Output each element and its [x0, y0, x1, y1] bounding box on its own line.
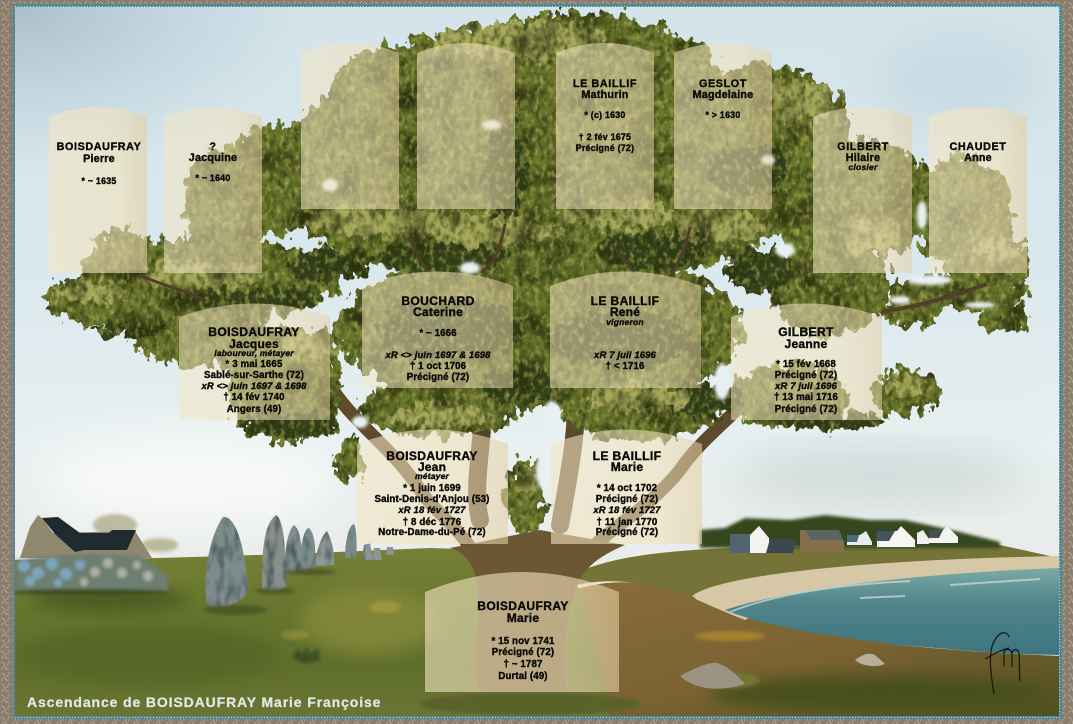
card: LE BAILLIF Mathurin — [556, 43, 654, 209]
card: GILBERT Jeanne — [731, 304, 882, 420]
main branches in crown — [140, 225, 985, 311]
card: ? Jacquine: * ~ 1640 — [195, 173, 231, 183]
card: BOISDAUFRAY Pierre: BOISDAUFRAY — [57, 141, 142, 153]
card: LE BAILLIF René: † < 1716 — [606, 361, 645, 372]
card: BOUCHARD Caterine: † 1 oct 1706 — [410, 361, 467, 372]
card: GILBERT Hilaire: Hilaire — [846, 152, 880, 164]
card: LE BAILLIF Mathurin: Précigné (72) — [576, 143, 634, 153]
foliage: crown and wings base — [45, 12, 1032, 533]
grass at trunk foot — [420, 693, 640, 715]
card: GESLOT Magdelaine: Magdelaine — [693, 89, 753, 101]
card: empty ancestor right — [417, 43, 515, 209]
stone shadows on grass — [203, 569, 336, 615]
card: BOISDAUFRAY Marie: Durtal (49) — [498, 671, 548, 682]
title: Ascendance de BOISDAUFRAY Marie Françoise — [27, 694, 381, 710]
card: BOISDAUFRAY Jean: * 1 juin 1699 — [403, 483, 461, 494]
hydrangea bushes — [10, 554, 170, 595]
card: BOISDAUFRAY Marie: Marie — [507, 611, 539, 625]
card: LE BAILLIF René: xR 7 juil 1696 — [593, 350, 657, 361]
card: ? Jacquine — [164, 107, 262, 273]
card: BOISDAUFRAY Pierre: Pierre — [83, 153, 115, 165]
card: BOISDAUFRAY Marie: BOISDAUFRAY — [477, 599, 569, 613]
card: GESLOT Magdelaine — [674, 43, 772, 209]
card: GILBERT Hilaire: closier — [848, 162, 878, 172]
card: BOISDAUFRAY Jean: Notre-Dame-du-Pé (72) — [378, 527, 486, 538]
card: LE BAILLIF Marie: Précigné (72) — [596, 494, 658, 505]
card: BOISDAUFRAY Jean: † 8 déc 1776 — [403, 517, 462, 528]
card: CHAUDET Anne: CHAUDET — [950, 141, 1006, 153]
left meadow — [15, 548, 610, 716]
ground stones on the slope — [680, 654, 885, 689]
card: LE BAILLIF Mathurin: † 2 fév 1675 — [579, 132, 631, 142]
card: LE BAILLIF Marie: xR 18 fév 1727 — [592, 505, 661, 516]
card: GESLOT Magdelaine: GESLOT — [699, 78, 747, 90]
card: BOISDAUFRAY Marie: Précigné (72) — [492, 647, 554, 658]
painter signature — [985, 633, 1020, 694]
card: GILBERT Jeanne: Précigné (72) — [775, 404, 837, 415]
card: LE BAILLIF Mathurin: * (c) 1630 — [584, 110, 626, 120]
foliage: deep shadow masses — [90, 120, 885, 437]
card: BOUCHARD Caterine: * ~ 1666 — [419, 328, 457, 339]
card: BOISDAUFRAY Jean: BOISDAUFRAY — [386, 449, 478, 463]
card: BOISDAUFRAY Jacques: Angers (49) — [227, 404, 281, 415]
card: GILBERT Jeanne: * 15 fév 1668 — [776, 359, 836, 370]
card: BOUCHARD Caterine — [362, 272, 513, 388]
foliage: sunlit masses — [54, 22, 1025, 496]
card: LE BAILLIF Mathurin: LE BAILLIF — [573, 78, 637, 90]
card: LE BAILLIF Marie: † 11 jan 1770 — [597, 517, 657, 528]
card: LE BAILLIF Marie: LE BAILLIF — [593, 449, 661, 463]
card: LE BAILLIF René: vigneron — [606, 317, 644, 327]
sea — [725, 568, 1059, 655]
card: BOUCHARD Caterine: Caterine — [413, 305, 463, 319]
card: GESLOT Magdelaine: * > 1630 — [705, 110, 741, 120]
card: LE BAILLIF Marie: * 14 oct 1702 — [597, 483, 657, 494]
card: BOISDAUFRAY Pierre: * ~ 1635 — [81, 176, 117, 186]
card: BOISDAUFRAY Jacques: Sablé-sur-Sarthe (72) — [204, 370, 304, 381]
trees behind cottage — [93, 514, 178, 552]
card: BOUCHARD Caterine: Précigné (72) — [407, 372, 469, 383]
card: BOUCHARD Caterine: xR <> juin 1697 & 1698 — [384, 350, 491, 361]
trunk base — [450, 530, 625, 692]
card: BOISDAUFRAY Jean: xR 18 fév 1727 — [397, 505, 466, 516]
tree branches and trunk — [330, 370, 760, 575]
card: BOISDAUFRAY Jacques — [179, 304, 330, 420]
card: BOISDAUFRAY Pierre — [49, 107, 147, 273]
card: CHAUDET Anne — [929, 107, 1027, 273]
card: ? Jacquine: ? — [209, 141, 217, 153]
card: GILBERT Jeanne: † 13 mai 1716 — [774, 392, 839, 403]
card: BOISDAUFRAY Jean: métayer — [415, 471, 450, 481]
card: LE BAILLIF Marie: Précigné (72) — [596, 527, 658, 538]
card: GILBERT Jeanne: GILBERT — [778, 325, 834, 339]
sky gaps through the foliage — [322, 120, 996, 490]
card: BOISDAUFRAY Marie: † ~ 1787 — [504, 659, 542, 670]
card: LE BAILLIF René: René — [610, 305, 640, 319]
stone cottage — [20, 515, 152, 558]
card: LE BAILLIF Marie — [551, 430, 702, 544]
village with white houses — [700, 515, 1000, 553]
beach — [692, 556, 1059, 620]
card: GILBERT Jeanne: xR 7 juil 1696 — [774, 381, 838, 392]
card: LE BAILLIF René — [550, 272, 701, 388]
standing stones — [205, 515, 394, 607]
card: LE BAILLIF Mathurin: Mathurin — [581, 89, 629, 101]
card: BOISDAUFRAY Jacques: BOISDAUFRAY — [208, 325, 300, 339]
card: LE BAILLIF Marie: Marie — [611, 460, 643, 474]
card: BOISDAUFRAY Marie: * 15 nov 1741 — [492, 636, 555, 647]
card: BOISDAUFRAY Jacques: * 3 mai 1665 — [226, 359, 283, 370]
card: ? Jacquine: Jacquine — [189, 152, 237, 164]
card: BOUCHARD Caterine: BOUCHARD — [401, 294, 475, 308]
card: LE BAILLIF René: LE BAILLIF — [591, 294, 659, 308]
card: BOISDAUFRAY Jacques: laboureur, métayer — [214, 348, 294, 358]
card: CHAUDET Anne: Anne — [964, 152, 992, 164]
card: BOISDAUFRAY Jacques: Jacques — [229, 337, 279, 351]
card: BOISDAUFRAY Jacques: † 14 fév 1740 — [223, 392, 285, 403]
card: BOISDAUFRAY Jean: Jean — [418, 460, 446, 474]
card: BOISDAUFRAY Marie — [425, 572, 619, 692]
card: empty ancestor left — [301, 43, 399, 209]
card: BOISDAUFRAY Jean: Saint-Denis-d'Anjou (53) — [375, 494, 489, 505]
right brown slope — [530, 582, 1059, 716]
card: GILBERT Hilaire: GILBERT — [837, 141, 889, 153]
card: BOISDAUFRAY Jean — [357, 430, 508, 544]
card: GILBERT Jeanne: Jeanne — [785, 337, 828, 351]
card: GILBERT Hilaire — [813, 107, 912, 273]
card: BOISDAUFRAY Jacques: xR <> juin 1697 & 1698 — [200, 381, 307, 392]
card: GILBERT Jeanne: Précigné (72) — [775, 370, 837, 381]
far shore grass — [560, 545, 1059, 600]
tree foliage — [45, 12, 1032, 533]
